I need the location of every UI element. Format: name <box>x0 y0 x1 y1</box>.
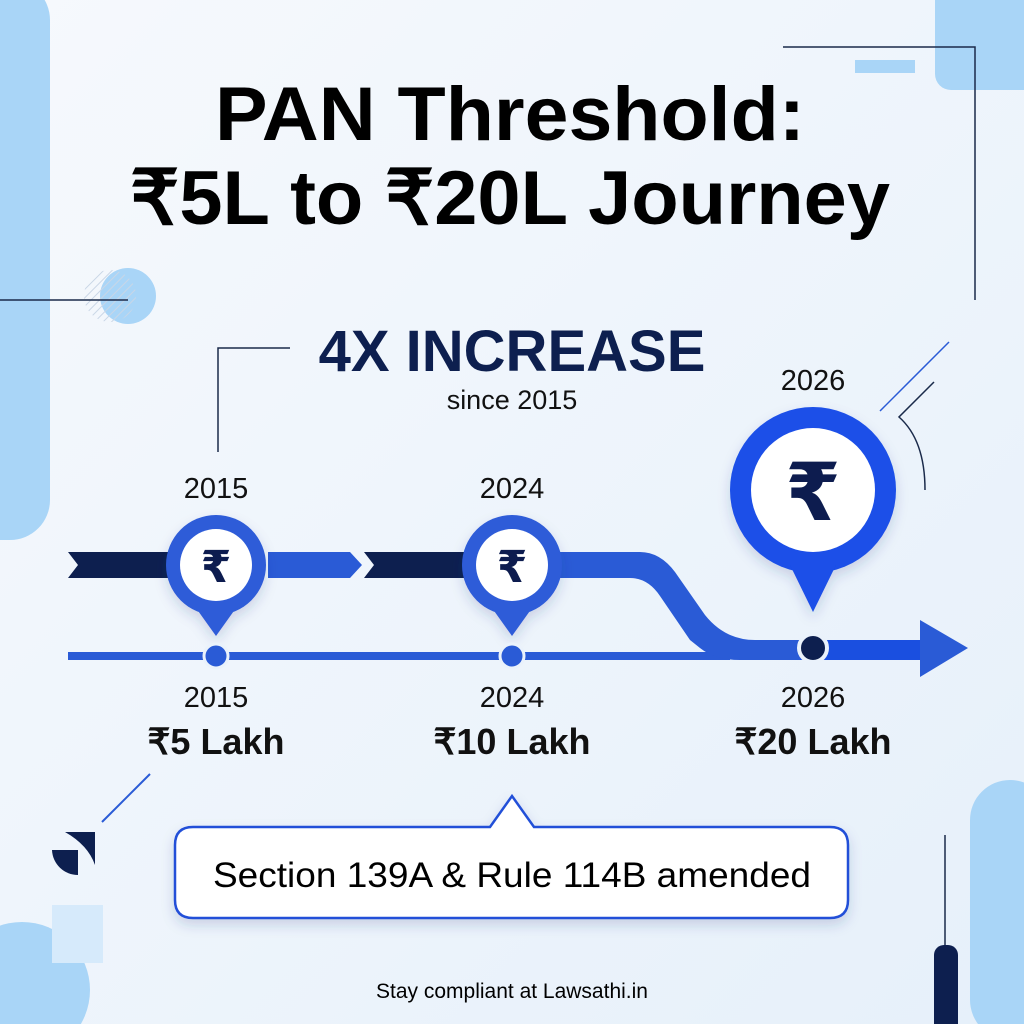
year labels top: 2015 <box>184 473 248 505</box>
labels bottom: 2024 <box>480 682 544 714</box>
deco arcs near 2026 <box>880 342 949 490</box>
pin: 2024: ₹ <box>497 542 527 593</box>
decoration: bottom left <box>0 774 150 1024</box>
ribbon segments <box>68 552 968 677</box>
heading: 4X increase: 4X INCREASE <box>319 319 705 384</box>
bracket line <box>218 348 290 452</box>
labels bottom <box>148 682 891 762</box>
pin: 2015 <box>166 515 266 636</box>
timeline base line <box>68 652 730 660</box>
title: PAN Threshold: <box>215 72 805 157</box>
pin: 2026 <box>730 407 896 612</box>
pin: 2026: ₹ <box>785 446 841 539</box>
title line 2: ₹5L to ₹20L Journey <box>130 156 890 241</box>
year labels top: 2026 <box>781 365 845 397</box>
pin: 2015: ₹ <box>201 542 231 593</box>
callout box: Section 139A & Rule 114B amended <box>213 856 811 895</box>
labels bottom: ₹5 Lakh <box>148 721 284 762</box>
labels bottom: 2015 <box>184 682 248 714</box>
labels bottom: ₹20 Lakh <box>735 721 891 762</box>
decoration: left panel <box>0 0 50 540</box>
decoration: top right block <box>935 0 1024 90</box>
labels bottom: ₹10 Lakh <box>434 721 590 762</box>
callout box <box>175 796 848 918</box>
decoration: bottom right <box>934 780 1024 1024</box>
year labels top: 2024 <box>480 473 544 505</box>
decoration: hatched circle <box>0 268 156 324</box>
labels bottom: 2026 <box>781 682 845 714</box>
year labels top <box>184 365 845 505</box>
subheading: since 2015 <box>447 385 577 415</box>
pin: 2024 <box>462 515 562 636</box>
footer: Stay compliant at Lawsathi.in <box>376 980 648 1003</box>
